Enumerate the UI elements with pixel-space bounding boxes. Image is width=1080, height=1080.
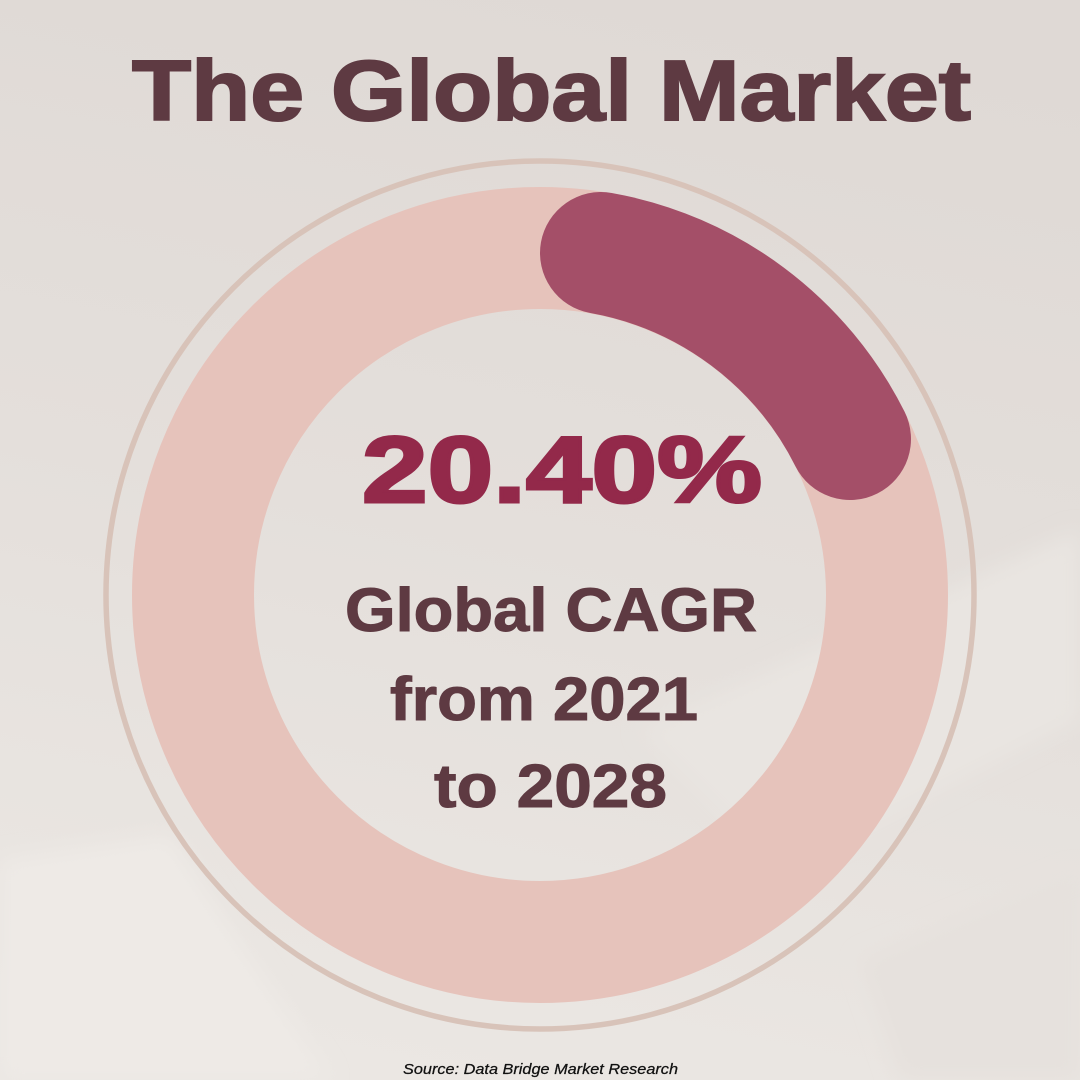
highlighted arc: 20.40% <box>601 253 850 439</box>
description: Global CAGR <box>345 576 757 644</box>
outer ring <box>106 161 974 1029</box>
description <box>345 576 757 820</box>
donut chart <box>106 161 974 1029</box>
description: to 2028 <box>434 752 667 820</box>
title: The Global Market <box>132 44 971 139</box>
donut track <box>193 248 887 942</box>
description: from 2021 <box>390 665 698 733</box>
source: Source: Data Bridge Market Research <box>403 1061 678 1078</box>
percentage value: 20.40% <box>362 417 762 522</box>
